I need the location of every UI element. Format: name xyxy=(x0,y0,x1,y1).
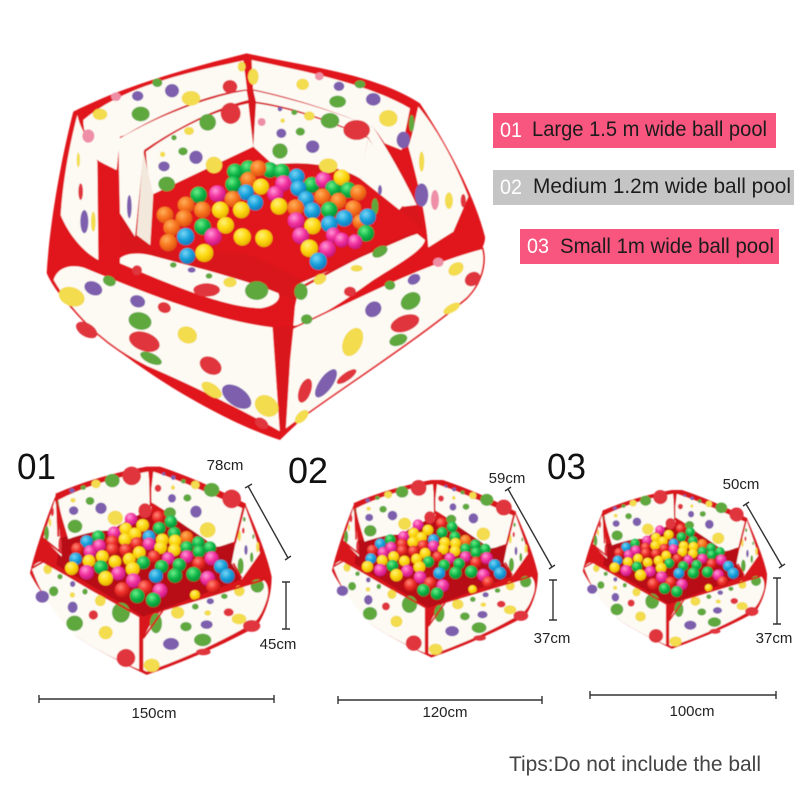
dimensions: medium pool: 120cm xyxy=(422,704,468,721)
photo: small pool xyxy=(583,490,767,649)
label: 03 small pool xyxy=(520,229,779,264)
dimensions: large pool: 78cm xyxy=(207,457,243,474)
heading: number 03: 03 xyxy=(547,446,586,487)
dimensions: large pool xyxy=(39,457,296,722)
polka dots on back walls xyxy=(77,62,466,233)
photo: large pool xyxy=(30,467,272,675)
note: tips: Tips:Do not include the ball xyxy=(509,753,761,776)
label: 01 large pool xyxy=(493,113,776,148)
label: 02 medium pool: 02 xyxy=(500,176,522,199)
dimensions: small pool: 50cm xyxy=(723,476,759,493)
dimensions: small pool: 37cm xyxy=(756,630,792,647)
polka dots on front walls xyxy=(56,243,483,432)
label: 02 medium pool xyxy=(493,170,794,205)
dimensions: medium pool xyxy=(338,470,570,721)
dimensions: small pool: 100cm xyxy=(669,703,715,720)
dimensions: medium pool: 59cm xyxy=(489,470,525,487)
label: 01 large pool: 01 xyxy=(500,119,522,142)
label: 01 large pool: Large 1.5 m wide ball pool xyxy=(532,118,767,141)
label: 03 small pool: 03 xyxy=(527,235,549,258)
heading: number 01: 01 xyxy=(17,446,56,487)
dimensions: large pool: 150cm xyxy=(131,705,177,722)
photo: medium pool xyxy=(332,480,538,658)
label: 03 small pool: Small 1m wide ball pool xyxy=(560,235,774,258)
label: 02 medium pool: Medium 1.2m wide ball pool xyxy=(533,175,791,198)
coloured balls xyxy=(157,160,376,270)
panel: main product photo of nested ball pools xyxy=(47,53,485,440)
heading: number 02: 02 xyxy=(288,450,328,491)
dimensions: large pool: 45cm xyxy=(260,636,296,653)
dimensions: medium pool: 37cm xyxy=(534,630,570,647)
dimensions: small pool xyxy=(590,476,792,720)
